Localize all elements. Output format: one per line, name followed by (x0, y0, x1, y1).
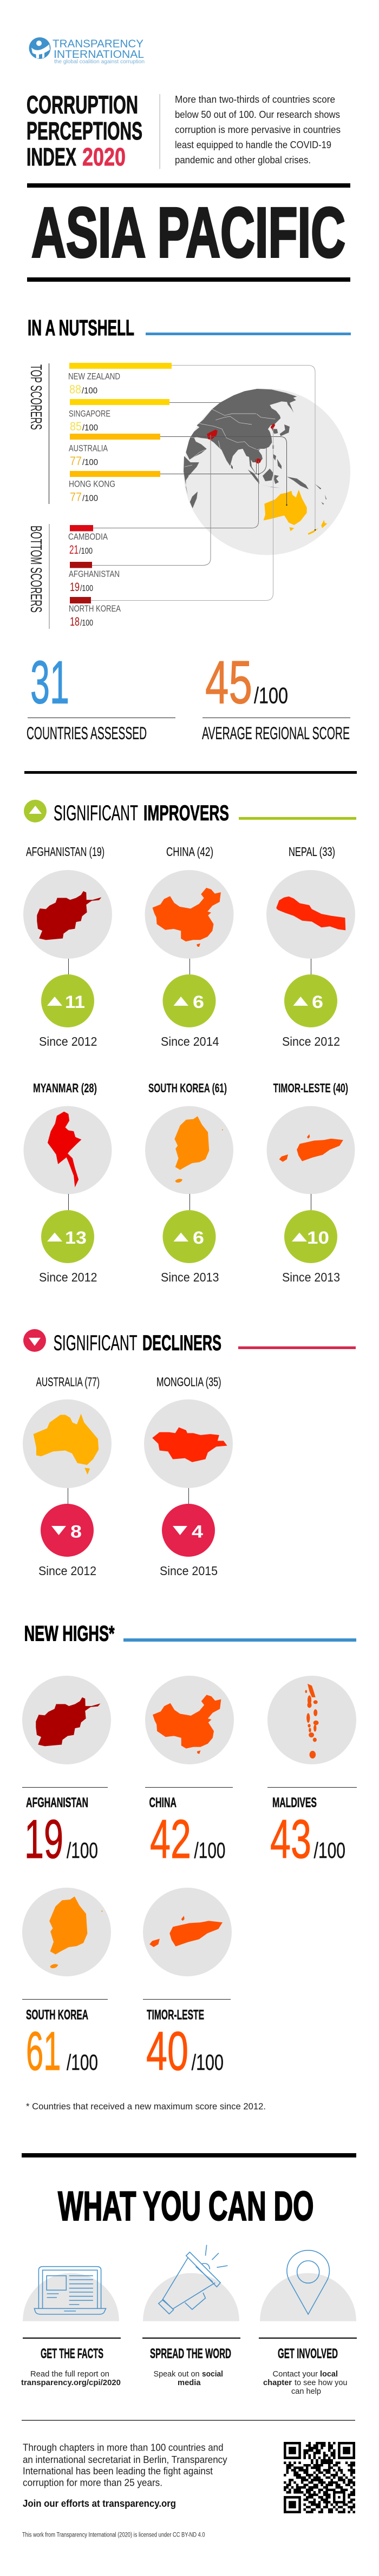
card: south korea new high: SOUTH KOREA (26, 2008, 88, 2023)
title: corruption perceptions index 2020: PERCEPTIONS (27, 117, 142, 145)
card: australia decliner: AUSTRALIA (77) (36, 1375, 100, 1389)
card: myanmar improver (24, 1081, 112, 1284)
stat: average regional score: 45 (205, 649, 252, 716)
heading: new highs: NEW HIGHS* (24, 1622, 115, 1646)
qr code (284, 2443, 355, 2512)
logo tagline: the global coalition against corruption (54, 59, 145, 65)
text: speak out: media (178, 2378, 201, 2387)
card: nepal improver: Since 2012 (282, 1034, 340, 1048)
bar: north korea: NORTH KOREA (69, 603, 121, 614)
icon: logo globe (29, 37, 51, 59)
card: china new high: /100 (194, 1838, 225, 1863)
stat: average regional score (202, 649, 350, 743)
bar: north korea: 18 (70, 615, 80, 628)
bar: afghanistan (69, 562, 120, 594)
card: china new high: 42 (150, 1809, 191, 1870)
card: nepal improver: 6 (312, 992, 323, 1012)
text: speak out: social (202, 2369, 223, 2379)
bar: australia (69, 434, 160, 468)
icon: map pin (287, 2250, 329, 2314)
card: china improver: Since 2014 (161, 1034, 219, 1048)
intro text: below 50 out of 100. Our research shows (175, 109, 340, 120)
chart: globe map (184, 388, 350, 555)
card: australia decliner (23, 1375, 112, 1578)
bar: new zealand (68, 363, 172, 396)
icon: up arrow (24, 800, 47, 822)
map: land masses (184, 389, 327, 535)
panel: bottom scorers (27, 524, 121, 629)
title: corruption perceptions index 2020: 2020 (82, 143, 126, 171)
footnote: * Countries that received a new maximum score since 2012. (26, 2101, 266, 2112)
panel: get involved (259, 2250, 357, 2396)
icon: down arrow (23, 1329, 46, 1352)
card: afghanistan new high: /100 (67, 1838, 98, 1863)
bar: australia: 77 (70, 454, 82, 468)
card: afghanistan new high (22, 1676, 111, 1870)
card: china improver: 6 (193, 992, 204, 1012)
card: australia decliner: 8 (70, 1522, 82, 1542)
title: corruption perceptions index 2020 (27, 91, 142, 171)
connector lines (91, 366, 316, 600)
card: south korea improver: 6 (193, 1228, 204, 1247)
card: afghanistan improver: AFGHANISTAN (19) (26, 845, 104, 859)
card: timor-leste new high: 40 (146, 2021, 188, 2082)
title: corruption perceptions index 2020: CORRUPTION (27, 91, 138, 119)
map: mongolia (152, 1428, 227, 1462)
card: myanmar improver: Since 2012 (39, 1270, 97, 1284)
card: afghanistan new high: AFGHANISTAN (26, 1795, 88, 1810)
text: call to action: Join our efforts at transparency.org (23, 2498, 176, 2509)
intro text: least equipped to handle the COVID-19 (175, 140, 331, 150)
panel: spread the word (142, 2245, 240, 2387)
bar: new zealand: /100 (82, 386, 97, 396)
card: maldives new high (267, 1676, 357, 1870)
logo wordmark line 2: INTERNATIONAL (54, 48, 144, 61)
map: nepal (276, 897, 345, 930)
card: maldives new high: 43 (270, 1809, 311, 1870)
bar: afghanistan: AFGHANISTAN (69, 569, 120, 579)
bar: north korea (69, 597, 121, 628)
heading: significant improvers: IMPROVERS (143, 801, 229, 825)
bar: new zealand: NEW ZEALAND (68, 371, 120, 381)
heading: in a nutshell: IN A NUTSHELL (28, 315, 134, 340)
card: nepal improver (266, 845, 355, 1048)
card: afghanistan improver (23, 845, 112, 1048)
bar: hong kong: 77 (70, 490, 82, 503)
map: myanmar (48, 1112, 81, 1187)
card: maldives new high: /100 (314, 1838, 345, 1863)
card: south korea new high: /100 (67, 2050, 98, 2075)
bar: afghanistan: 19 (70, 580, 80, 594)
bar: afghanistan: /100 (80, 584, 93, 593)
text: about transparency international: an international secretariat in Berlin, Transparency (23, 2454, 227, 2465)
bar: hong kong (69, 471, 160, 503)
title: corruption perceptions index 2020: INDEX (27, 143, 76, 171)
text: read the full report: transparency.org/cpi/2020 (21, 2378, 121, 2387)
panel: spread the word: SPREAD THE WORD (150, 2346, 231, 2361)
card: afghanistan new high: 19 (24, 1809, 63, 1870)
map: maldives (305, 1684, 318, 1758)
text: read the full report: Read the full report on (30, 2369, 109, 2379)
bar: australia: AUSTRALIA (69, 443, 108, 454)
heading: significant improvers: SIGNIFICANT (54, 801, 138, 825)
card: china improver (145, 845, 234, 1048)
label: top scorers: TOP SCORERS (27, 364, 44, 430)
card: australia decliner: Since 2012 (38, 1564, 96, 1578)
heading: new highs (24, 1622, 356, 1646)
icon: laptop (34, 2267, 106, 2314)
intro text: corruption is more pervasive in countries (175, 124, 341, 135)
card: afghanistan improver: 11 (65, 992, 85, 1012)
text: contact your local chapter (263, 2369, 348, 2396)
text: contact your local chapter: to see how you (295, 2378, 348, 2387)
text: speak out: Speak out on (154, 2369, 199, 2379)
card: timor-leste improver (266, 1081, 355, 1284)
panel: get the facts (21, 2267, 121, 2387)
intro text: pandemic and other global crises. (175, 155, 311, 165)
label: bottom scorers: BOTTOM SCORERS (27, 526, 44, 613)
stat: average regional score: /100 (254, 683, 288, 708)
card: south korea improver: SOUTH KOREA (61) (148, 1081, 227, 1095)
card: timor-leste new high: TIMOR-LESTE (147, 2008, 204, 2023)
card: mongolia decliner: MONGOLIA (35) (156, 1375, 221, 1389)
card: afghanistan improver: Since 2012 (39, 1034, 97, 1048)
text: contact your local chapter: local (320, 2369, 338, 2379)
card: myanmar improver: 13 (65, 1228, 87, 1247)
bar: cambodia: 21 (69, 543, 79, 556)
bar: singapore: /100 (82, 423, 98, 433)
bar: cambodia: CAMBODIA (68, 532, 108, 542)
stat: countries assessed: COUNTRIES ASSESSED (27, 723, 147, 743)
card: mongolia decliner: 4 (192, 1522, 203, 1542)
bar: north korea: /100 (80, 619, 93, 628)
card: nepal improver: NEPAL (33) (289, 845, 335, 859)
card: china new high: CHINA (149, 1795, 177, 1810)
card: china improver: CHINA (42) (166, 845, 213, 859)
text: contact your local chapter: chapter (263, 2378, 292, 2387)
panel: top scorers (27, 363, 172, 504)
intro text: More than two-thirds of countries score (175, 94, 335, 105)
panel: get the facts: GET THE FACTS (41, 2346, 103, 2361)
card: mongolia decliner (144, 1375, 233, 1578)
panel: get involved: GET INVOLVED (278, 2346, 338, 2361)
header: logo (29, 37, 145, 65)
bar: hong kong: /100 (82, 494, 98, 503)
stat: countries assessed (27, 649, 175, 743)
heading: significant improvers (24, 800, 356, 825)
bar: singapore (69, 399, 169, 433)
bar: singapore: 85 (70, 420, 82, 433)
intro text (175, 94, 341, 165)
map: australia (34, 1414, 99, 1475)
text: contact your local chapter: Contact your (273, 2369, 318, 2379)
text: contact your local chapter: can help (291, 2387, 321, 2396)
bar: singapore: SINGAPORE (69, 408, 110, 419)
heading: significant decliners: SIGNIFICANT (54, 1331, 138, 1355)
bar: cambodia: /100 (79, 547, 93, 556)
text: about transparency international: Through chapters in more than 100 countries and (23, 2442, 223, 2453)
card: maldives new high: MALDIVES (272, 1795, 317, 1810)
card: south korea improver (145, 1081, 233, 1284)
card: timor-leste new high (143, 1888, 232, 2082)
bar: hong kong: HONG KONG (69, 479, 115, 489)
card: mongolia decliner: Since 2015 (160, 1564, 218, 1578)
stat: countries assessed: 31 (30, 649, 69, 716)
card: myanmar improver: MYANMAR (28) (33, 1081, 97, 1095)
text: about transparency international: corruption for more than 25 years. (23, 2478, 162, 2488)
bar: cambodia (68, 525, 108, 556)
heading: significant decliners: DECLINERS (142, 1331, 221, 1355)
card: timor-leste improver: Since 2013 (282, 1270, 340, 1284)
card: timor-leste improver: 10 (307, 1228, 329, 1247)
heading: significant decliners (23, 1329, 356, 1355)
card: china new high (145, 1676, 234, 1870)
bar: new zealand: 88 (69, 383, 81, 396)
text: about transparency international (23, 2442, 227, 2488)
text: about transparency international: International has been leading the fight against (23, 2466, 213, 2477)
icon: megaphone (159, 2245, 228, 2314)
bar: australia: /100 (82, 458, 98, 467)
card: south korea new high (22, 1888, 111, 2082)
text: read the full report (21, 2369, 121, 2387)
text: licence: This work from Transparency International (2020) is licensed under CC BY-ND 4.0 (22, 2532, 205, 2539)
text: speak out (154, 2369, 223, 2387)
logo wordmark: TRANSPARENCY (53, 38, 143, 50)
card: south korea improver: Since 2013 (161, 1270, 219, 1284)
card: south korea new high: 61 (26, 2021, 61, 2082)
card: timor-leste new high: /100 (192, 2050, 224, 2075)
